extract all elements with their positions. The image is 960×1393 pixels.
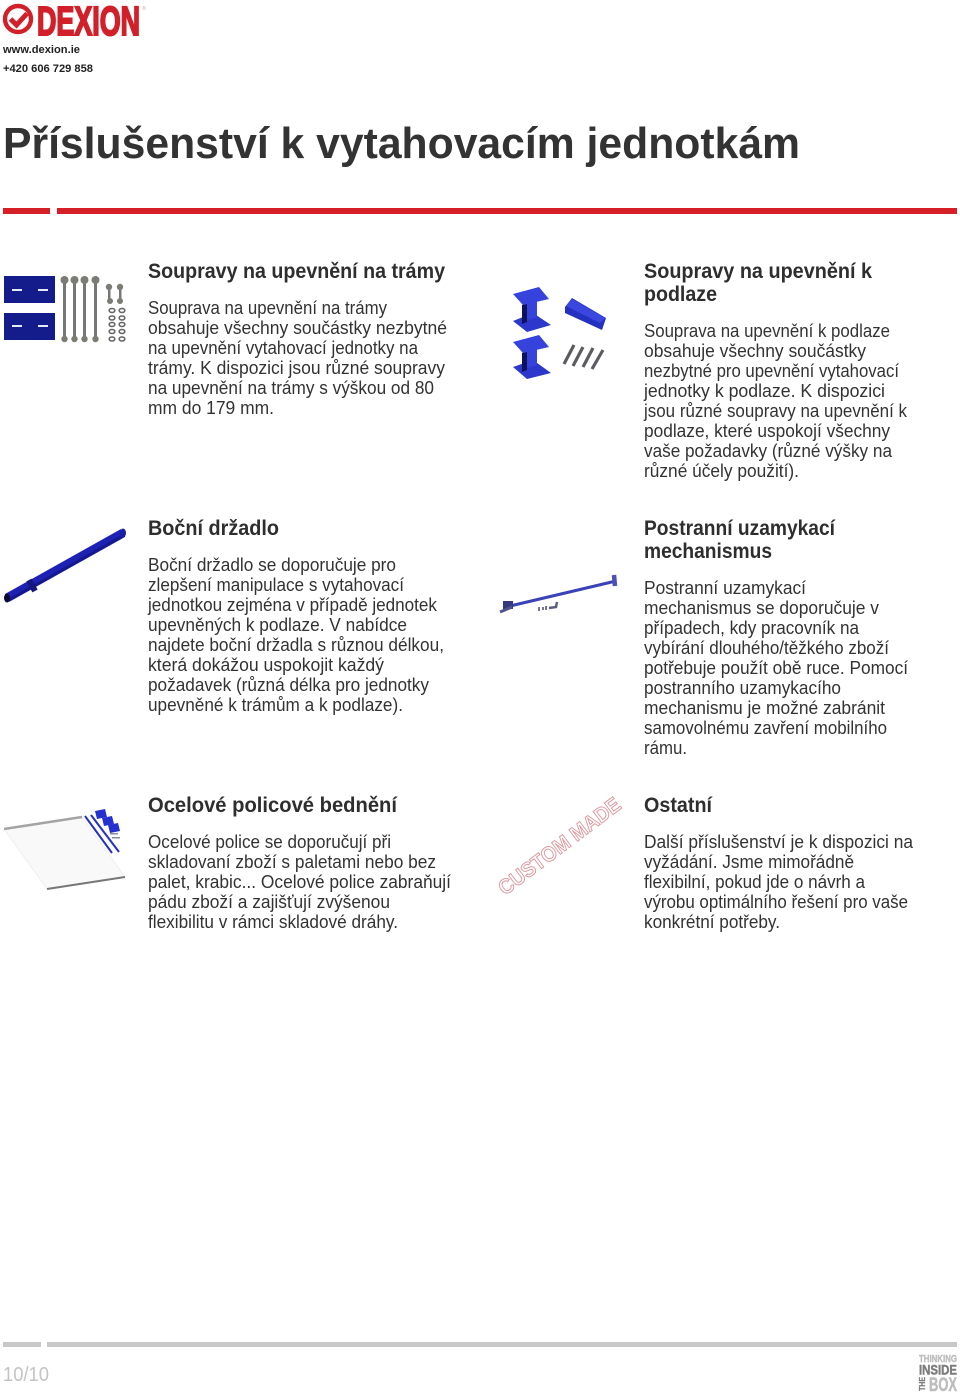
red header rule (3, 208, 957, 214)
text block: výrobu optimálního řešení pro vaše (644, 891, 908, 912)
text block: mm do 179 mm. (148, 397, 274, 418)
website: www.dexion.ie (2, 44, 80, 56)
phone number: +420 606 729 858 (3, 63, 93, 75)
icon: floor fixing kit (513, 287, 606, 379)
text block: trámy. K dispozici jsou různé soupravy (148, 357, 446, 378)
heading: Ocelové policové bednění (148, 794, 398, 817)
icon: steel shelf (4, 809, 125, 889)
text block: Boční držadlo se doporučuje pro (148, 554, 396, 575)
panel: side locking mechanism (500, 517, 909, 758)
heading (644, 517, 836, 563)
text block (644, 577, 909, 758)
heading: podlaze (644, 283, 717, 306)
panel: beam fixing kits (4, 260, 447, 418)
text block: pádu zboží a zajišťují zvýšenou (148, 891, 390, 912)
text block: jednotky k podlaze. K dispozici (643, 380, 885, 401)
text block: podlaze, které uspokojí všechny (644, 420, 891, 441)
title: Příslušenství k vytahovacím jednotkám (3, 119, 800, 168)
text block: obsahuje všechny součástky (644, 340, 867, 361)
text block: jednotkou zejména v případě jednotek (147, 594, 438, 615)
text block: flexibilní, pokud jde o návrh a (644, 871, 866, 892)
text block: různé účely použití). (644, 460, 799, 481)
text block: Souprava na upevnění k podlaze (644, 320, 890, 341)
grey footer rule (3, 1342, 957, 1347)
logo: thinking inside the box (918, 1354, 957, 1393)
text block: mechanismus se doporučuje v (644, 597, 880, 618)
heading: Boční držadlo (148, 517, 279, 540)
text block: upevněné k trámům a k podlaze). (148, 694, 403, 715)
logo: thinking inside the box: THE (918, 1376, 927, 1391)
icon: side locking bar (500, 575, 616, 612)
text block: postranního uzamykacího (644, 677, 841, 698)
text block (643, 320, 908, 481)
text block: flexibilitu v rámci skladové dráhy. (148, 911, 398, 932)
text block: konkrétní potřeby. (644, 911, 780, 932)
text block: upevněných k podlaze. V nabídce (148, 614, 407, 635)
text block: případech, kdy pracovník na (644, 617, 860, 638)
text block: vyžádání. Jsme mimořádně (644, 851, 854, 872)
text block: na upevnění na trámy s výškou od 80 (148, 377, 434, 398)
text block: jsou různé soupravy na upevnění k (643, 400, 908, 421)
heading: mechanismus (644, 540, 772, 563)
logo: Dexion: ® (142, 5, 146, 12)
panel: side handle (4, 517, 444, 715)
panel: floor fixing kits (513, 260, 908, 481)
logo: Dexion (5, 0, 146, 44)
icon: custom made stamp: CUSTOM MADE (494, 793, 625, 900)
text block: nezbytné pro upevnění vytahovací (644, 360, 900, 381)
panel: other (494, 793, 914, 932)
text block (148, 297, 447, 418)
text block: Souprava na upevnění na trámy (148, 297, 388, 318)
text block: vaše požadavky (různé výšky na (644, 440, 893, 461)
text block: Ocelové police se doporučují při (148, 831, 391, 852)
text block: skladovaní zboží s paletami nebo bez (148, 851, 436, 872)
text block (147, 554, 444, 715)
panel: steel shelving (4, 794, 452, 932)
icon: side handle (4, 528, 126, 602)
icon: beam fixing kit (4, 276, 125, 342)
text block (148, 831, 452, 932)
page number: 10/10 (3, 1364, 49, 1386)
heading: Soupravy na upevnění k (644, 260, 872, 283)
text block: zlepšení manipulace s vytahovací (148, 574, 405, 595)
heading: Soupravy na upevnění na trámy (148, 260, 445, 283)
text block: samovolnému zavření mobilního (644, 717, 887, 738)
text block: Další příslušenství je k dispozici na (644, 831, 914, 852)
text block: obsahuje všechny součástky nezbytné (148, 317, 447, 338)
heading: Ostatní (644, 794, 713, 817)
heading (644, 260, 872, 306)
text block: požadavek (různá délka pro jednotky (148, 674, 430, 695)
text block: na upevnění vytahovací jednotky na (148, 337, 419, 358)
text block: která dokážou uspokojit každý (148, 654, 385, 675)
text block: najdete boční držadla s různou délkou, (148, 634, 444, 655)
text block: Postranní uzamykací (644, 577, 807, 598)
text block: rámu. (644, 737, 687, 758)
text block (644, 831, 914, 932)
text block: palet, krabic... Ocelové police zabraňují (148, 871, 452, 892)
text block: potřebuje použít obě ruce. Pomocí (644, 657, 909, 678)
text block: vybírání dlouhého/těžkého zboží (644, 637, 890, 658)
text block: mechanismu je možné zabránit (644, 697, 885, 718)
heading: Postranní uzamykací (644, 517, 836, 540)
